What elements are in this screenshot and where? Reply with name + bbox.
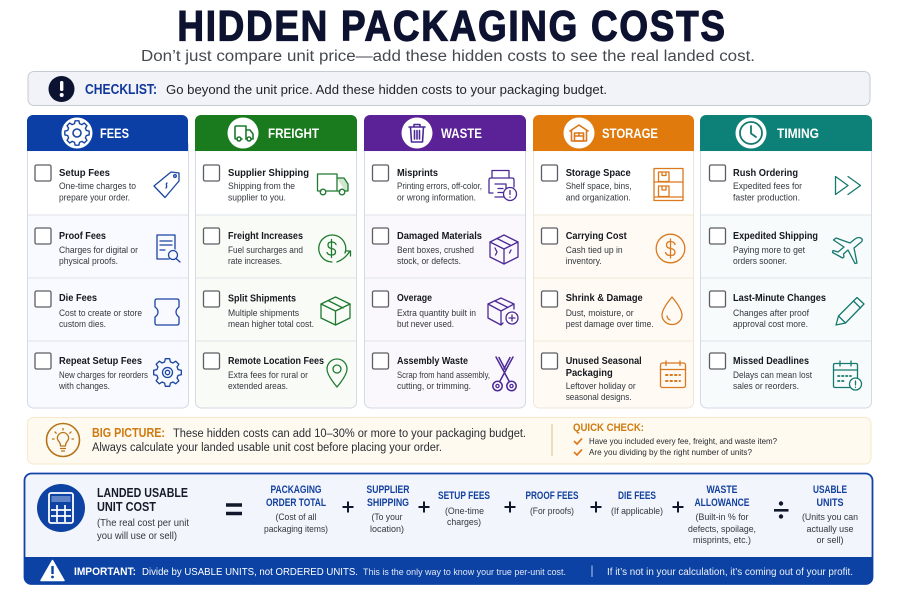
item: missed deadlines: sales or reorders. <box>733 381 799 391</box>
icon: truck <box>318 174 348 195</box>
formula heading: UNIT COST <box>97 499 156 514</box>
term: setup fees: charges) <box>447 517 481 527</box>
icon: exclamation <box>48 76 74 102</box>
item: assembly waste: cutting, or trimming. <box>397 381 471 391</box>
plus <box>590 502 602 512</box>
item: shrink and damage: Dust, moisture, or <box>566 308 634 318</box>
item: misprints: or wrong information. <box>397 192 476 202</box>
term: die fees: DIE FEES <box>618 490 656 502</box>
icon: map pin <box>327 359 347 387</box>
item: freight increases: rate increases. <box>228 256 282 266</box>
term: waste allowance: misprints, etc.) <box>693 535 751 545</box>
item: expedited shipping: Paying more to get <box>733 245 805 255</box>
header: waste <box>364 115 526 151</box>
term: packaging order total: ORDER TOTAL <box>266 497 326 509</box>
equals sign <box>226 505 242 514</box>
panel: landed usable unit cost formula <box>24 474 873 584</box>
item: overage <box>372 291 518 329</box>
item: freight increases <box>204 228 350 266</box>
term: waste allowance <box>688 484 756 545</box>
quick check: QUICK CHECK: <box>573 422 644 434</box>
item: assembly waste <box>372 353 516 391</box>
item: rush ordering: Expedited fees for <box>733 181 802 191</box>
term: usable units: or sell) <box>816 535 844 545</box>
item: freight increases: Freight Increases <box>228 231 303 242</box>
item: misprints: Misprints <box>397 168 438 179</box>
big picture label: BIG PICTURE: <box>92 426 165 440</box>
term: packaging order total: packaging items) <box>264 524 328 534</box>
item: unused seasonal packaging: Leftover holiday or <box>566 381 636 391</box>
item: last-minute changes: Changes after proof <box>733 308 809 318</box>
item: damaged materials: stock, or defects. <box>397 256 461 266</box>
icon: water drop <box>662 297 682 324</box>
term: usable units: actually use <box>806 524 854 534</box>
formula heading: LANDED USABLE <box>97 485 188 500</box>
item: carrying cost: Carrying Cost <box>566 231 627 242</box>
plus <box>342 502 354 512</box>
header: waste: WASTE <box>441 125 482 141</box>
icon: airplane <box>832 238 862 264</box>
icon: scissors <box>493 357 516 391</box>
header: timing: TIMING <box>777 125 819 141</box>
item: unused seasonal packaging: seasonal designs. <box>566 392 632 402</box>
item: setup fees: Setup Fees <box>59 168 110 179</box>
term: die fees <box>611 490 663 516</box>
item: setup fees <box>35 165 179 202</box>
icon: calendar <box>660 361 686 388</box>
item: storage space <box>542 165 683 202</box>
item: storage space: Shelf space, bins, <box>566 181 632 191</box>
subtitle: Don’t just compare unit price—add these hidden costs to see the real landed cost. <box>141 48 755 65</box>
item: remote location fees: extended areas. <box>228 381 288 391</box>
item: unused seasonal packaging: Packaging <box>566 368 613 379</box>
item: supplier shipping: Shipping from the <box>228 181 295 191</box>
panel: storage <box>533 115 694 408</box>
term: usable units <box>802 484 858 545</box>
icon: gear <box>154 359 181 386</box>
item: split shipments: Multiple shipments <box>228 308 299 318</box>
item: storage space: and organization. <box>566 192 631 202</box>
item: repeat setup fees: Repeat Setup Fees <box>59 356 142 367</box>
item: proof fees: Charges for digital or <box>59 245 138 255</box>
icon: calculator <box>37 484 85 532</box>
formula heading: (The real cost per unit <box>97 518 189 529</box>
profit note: If it’s not in your calculation, it’s coming out of your profit. <box>607 567 853 578</box>
panel: waste <box>364 115 526 408</box>
term: setup fees <box>438 490 490 527</box>
item: die fees: custom dies. <box>59 319 106 329</box>
item: rush ordering: Rush Ordering <box>733 168 798 179</box>
term: die fees: (If applicable) <box>611 506 663 516</box>
checklist text: Go beyond the unit price. Add these hidden costs to your packaging budget. <box>166 82 607 97</box>
item: last-minute changes <box>710 291 864 329</box>
item: split shipments: mean higher total cost. <box>228 319 314 329</box>
plus <box>672 502 684 512</box>
important text: IMPORTANT: <box>74 566 136 578</box>
icon: warning triangle <box>41 560 64 580</box>
panel: freight <box>195 115 357 408</box>
item: missed deadlines: Missed Deadlines <box>733 356 809 367</box>
icon: dollar coin <box>656 234 685 263</box>
item: expedited shipping: orders sooner. <box>733 256 787 266</box>
item: supplier shipping: Supplier Shipping <box>228 168 309 179</box>
item: die fees <box>35 291 179 329</box>
item: unused seasonal packaging: Unused Seasonal <box>566 356 642 367</box>
item: setup fees: One-time charges to <box>59 181 136 191</box>
header: fees: FEES <box>100 125 129 141</box>
item: split shipments <box>204 291 350 329</box>
icon: dollar with arrow <box>319 235 350 262</box>
item: misprints: Printing errors, off-color, <box>397 181 482 191</box>
header: storage: STORAGE <box>602 125 658 141</box>
term: packaging order total: PACKAGING <box>270 484 322 496</box>
plus <box>418 502 430 512</box>
term: supplier shipping: (To your <box>372 512 402 522</box>
icon: price tag <box>154 172 179 198</box>
quick check: Have you included every fee, freight, and waste item? <box>589 436 777 446</box>
item: expedited shipping <box>710 228 862 266</box>
formula heading: you will use or sell) <box>97 531 177 542</box>
item: rush ordering <box>710 165 860 202</box>
term: supplier shipping: SHIPPING <box>367 497 409 509</box>
item: repeat setup fees <box>35 353 181 391</box>
divide sign <box>774 501 788 519</box>
term: packaging order total <box>264 484 328 534</box>
item: expedited shipping: Expedited Shipping <box>733 231 818 242</box>
item: damaged materials: Bent boxes, crushed <box>397 245 474 255</box>
checklist label: CHECKLIST: <box>85 82 157 98</box>
icon: box <box>321 297 350 325</box>
item: shrink and damage <box>542 291 682 329</box>
item: rush ordering: faster production. <box>733 192 800 202</box>
quick check <box>573 422 777 457</box>
term: supplier shipping: SUPPLIER <box>366 484 410 496</box>
header: freight: FREIGHT <box>268 125 319 141</box>
big picture text: Always calculate your landed usable unit cost before placing your order. <box>92 442 442 454</box>
quick check: Are you dividing by the right number of units? <box>589 447 752 457</box>
header: fees <box>27 115 188 151</box>
icon: calendar alert <box>834 361 862 390</box>
item: missed deadlines: Delays can mean lost <box>733 370 812 380</box>
item: remote location fees <box>204 353 347 391</box>
item: die fees: Cost to create or store <box>59 308 142 318</box>
important text <box>74 566 566 578</box>
item: storage space: Storage Space <box>566 168 631 179</box>
term: supplier shipping: location) <box>370 524 404 534</box>
item: split shipments: Split Shipments <box>228 294 296 304</box>
item: supplier shipping: supplier to you. <box>228 192 286 202</box>
icon: die outline <box>155 299 179 325</box>
item: carrying cost: Cash tied up in <box>566 245 623 255</box>
term: proof fees: PROOF FEES <box>526 490 579 502</box>
term: supplier shipping <box>366 484 410 534</box>
big picture text <box>92 428 526 454</box>
icon: pencil <box>836 298 864 325</box>
icon: damaged box <box>490 235 518 264</box>
term: usable units: USABLE <box>813 484 847 496</box>
term: proof fees <box>526 490 579 516</box>
item: damaged materials <box>372 228 518 266</box>
item: assembly waste: Scrap from hand assembly, <box>397 370 490 380</box>
term: setup fees: (One-time <box>445 506 484 516</box>
item: remote location fees: Extra fees for rural or <box>228 370 308 380</box>
icon: printer alert <box>489 170 516 200</box>
item: unused seasonal packaging <box>542 353 686 402</box>
item: assembly waste: Assembly Waste <box>397 356 468 367</box>
item: freight increases: Fuel surcharges and <box>228 245 303 255</box>
item: repeat setup fees: New charges for reorders <box>59 370 148 380</box>
item: proof fees <box>35 228 180 266</box>
icon: shelves <box>654 168 683 200</box>
item: remote location fees: Remote Location Fees <box>228 356 324 367</box>
icon: document search <box>157 235 180 262</box>
item: overage: Extra quantity built in <box>397 308 476 318</box>
term: setup fees: SETUP FEES <box>438 490 490 502</box>
item: overage: but never used. <box>397 319 454 329</box>
item: repeat setup fees: with changes. <box>58 381 110 391</box>
item: damaged materials: Damaged Materials <box>397 231 482 242</box>
term: waste allowance: WASTE <box>706 484 738 496</box>
big picture text: These hidden costs can add 10–30% or more to your packaging budget. <box>173 428 526 440</box>
item: overage: Overage <box>397 293 432 304</box>
item: last-minute changes: Last-Minute Changes <box>733 293 826 304</box>
term: waste allowance: (Built-in % for <box>696 512 748 522</box>
formula heading <box>97 485 189 542</box>
term: waste allowance: defects, spoilage, <box>688 524 756 534</box>
term: waste allowance: ALLOWANCE <box>694 497 750 509</box>
header: storage <box>533 115 694 151</box>
term: proof fees: (For proofs) <box>530 506 574 516</box>
header: freight <box>195 115 357 151</box>
icon: fast forward <box>836 176 860 194</box>
item: missed deadlines <box>710 353 862 391</box>
item: last-minute changes: approval cost more. <box>733 319 808 329</box>
term: usable units: UNITS <box>816 497 844 509</box>
term: usable units: (Units you can <box>802 512 858 522</box>
item: shrink and damage: Shrink & Damage <box>566 293 643 304</box>
title: HIDDEN PACKAGING COSTS <box>177 3 727 50</box>
item: proof fees: Proof Fees <box>59 231 106 242</box>
important text: Divide by USABLE UNITS, not ORDERED UNITS. <box>142 566 358 578</box>
item: carrying cost: inventory. <box>566 256 602 266</box>
item: misprints <box>372 165 516 202</box>
panel: big picture <box>28 418 871 464</box>
item: setup fees: prepare your order. <box>59 192 130 202</box>
item: carrying cost <box>542 228 685 266</box>
item: shrink and damage: pest damage over time. <box>566 319 654 329</box>
plus <box>504 502 516 512</box>
icon: box plus <box>488 298 518 325</box>
item: die fees: Die Fees <box>59 293 97 304</box>
term: packaging order total: (Cost of all <box>276 512 316 522</box>
item: proof fees: physical proofs. <box>59 256 118 266</box>
important band <box>24 557 873 584</box>
header: timing <box>700 115 872 151</box>
panel: fees <box>27 115 188 408</box>
icon: light bulb <box>46 424 80 456</box>
item: supplier shipping <box>204 165 348 202</box>
important text: This is the only way to know your true per-unit cost. <box>363 567 566 577</box>
panel: checklist banner <box>28 72 870 106</box>
panel: timing <box>700 115 872 408</box>
